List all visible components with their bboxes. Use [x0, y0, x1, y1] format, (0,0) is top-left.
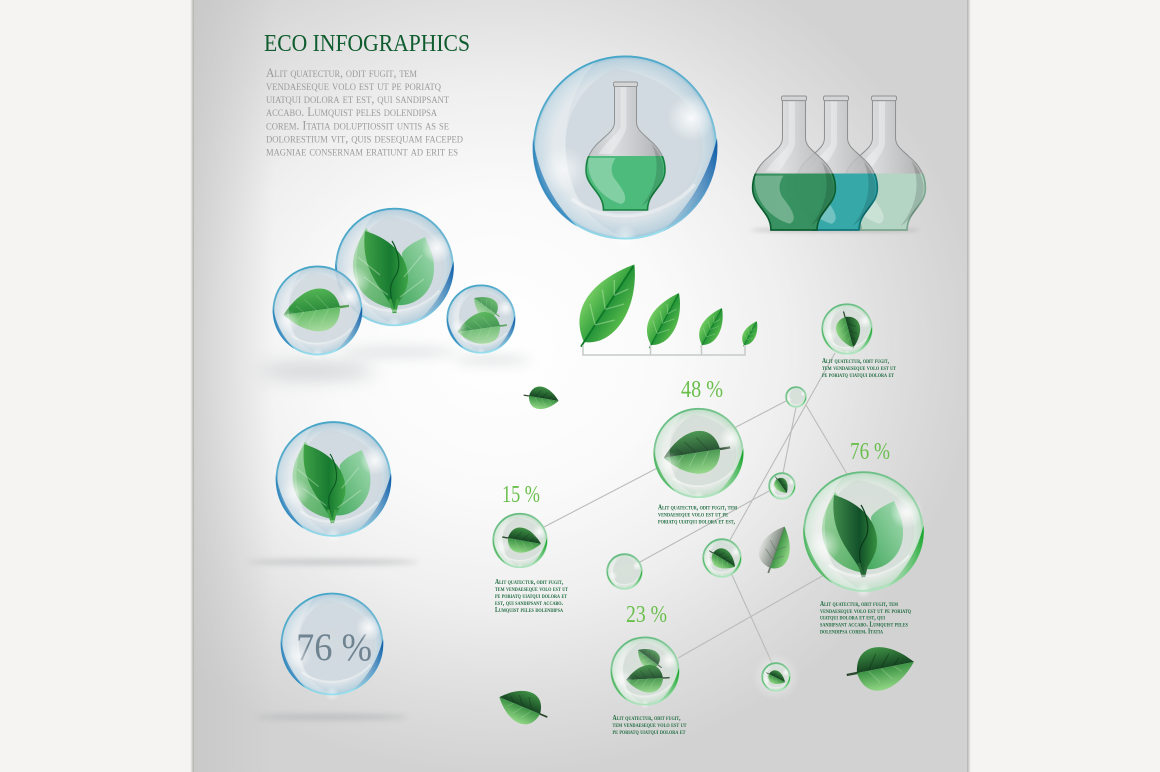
- icon: free leaf bottom left: [493, 682, 554, 732]
- icon: leaf: [832, 308, 865, 351]
- scale bracket: [583, 345, 745, 355]
- icon: free leaf bottom right: [843, 641, 918, 696]
- icon: leaf size 3: [692, 303, 730, 352]
- bubble: 76 percent: [281, 593, 383, 701]
- icon: double leaf: [353, 228, 434, 313]
- caption top bubble: tem vendaeseque volo est ut: [822, 365, 897, 372]
- bubble: plain empty: [607, 554, 642, 591]
- icon: top small leaf: [468, 290, 505, 325]
- intro text block: magniae consernam eratiunt ad erit es: [266, 144, 458, 158]
- intro text block: dolorestium vit, quis desequam faceped: [266, 132, 463, 146]
- caption 76 percent: [820, 601, 911, 636]
- caption 48 percent: poriatq uiatqui dolora et est,: [658, 518, 735, 526]
- connector lines: [544, 353, 847, 663]
- bubble: 23 percent two leaves: [611, 637, 679, 709]
- icon: leaf size 4: [738, 318, 762, 349]
- title: ECO INFOGRAPHICS: [264, 31, 470, 57]
- caption 15 percent: Lumquist peles dolendipsa: [495, 607, 563, 614]
- bubble cluster: right two leaves: [447, 285, 515, 357]
- intro text block: corem. Itatia doluptiossit untis as se: [266, 118, 449, 132]
- icon: leaf size 1: [563, 253, 652, 358]
- caption 48 percent: Alit quatectur, odit fugit, tem: [658, 504, 737, 512]
- icon: pale flask: [843, 96, 925, 230]
- icon: double leaf dark: [822, 492, 903, 577]
- intro text block: [266, 66, 463, 158]
- caption 76 percent: vendaeseque volo est ut pe poriatq: [820, 608, 911, 615]
- caption 23 percent: [612, 715, 687, 736]
- icon: small leaf: [632, 642, 667, 675]
- caption 23 percent: Alit quatectur, odit fugit,: [612, 715, 681, 722]
- icon: bottom leaf: [455, 309, 509, 348]
- caption 76 percent: Alit quatectur, odit fugit, tem: [820, 601, 898, 608]
- caption 15 percent: Alit quatectur, odit fugit,: [495, 579, 563, 586]
- icon: leaf: [770, 473, 792, 497]
- caption 15 percent: pe poriatq uiatqui dolora et: [495, 593, 568, 600]
- bubble cluster: large double leaf: [335, 208, 454, 333]
- caption 76 percent: dolendipsa corem. Itatia: [820, 628, 883, 636]
- bubble with flask: [533, 56, 717, 251]
- percent 23: 23 %: [626, 602, 667, 628]
- caption 48 percent: vendaeseque volo est ut pe: [658, 512, 729, 518]
- intro text block: uiatqui dolora et est, qui sandipsant: [266, 92, 449, 106]
- bubble: small leaf upper: [769, 473, 795, 501]
- bubble: 76 percent: 76 %: [296, 626, 372, 669]
- bubble: 48 percent leaf: [654, 408, 743, 503]
- shadow under middle bubble: [248, 559, 418, 565]
- bubble: 76 percent double leaf: [803, 472, 924, 599]
- icon: flask in bubble: [586, 82, 665, 210]
- icon: leaf: [704, 542, 740, 575]
- icon: leaf: [500, 525, 543, 556]
- caption 15 percent: [495, 579, 569, 614]
- shadow under percent bubble: [256, 714, 408, 720]
- three flasks: [750, 96, 925, 232]
- intro text block: Alit quatectur, odit fugit, tem: [266, 66, 417, 80]
- caption 15 percent: est, qui sandipsant accabo.: [495, 600, 563, 607]
- icon: leaf size 2: [637, 287, 691, 354]
- bubble: network node: [786, 387, 806, 408]
- caption 48 percent: [658, 504, 737, 526]
- caption top bubble: Alit quatectur, odit fugit,: [822, 358, 889, 365]
- caption 76 percent: uiatqui dolora et est, qui: [820, 614, 885, 622]
- icon: double leaf: [293, 441, 370, 523]
- poster panel: [192, 0, 969, 772]
- icon: leaf: [763, 667, 788, 688]
- intro text block: vendaeseque volo est ut pe poriatq: [266, 79, 441, 93]
- icon: teal flask: [795, 96, 877, 230]
- percent 48: 48 %: [681, 377, 723, 403]
- caption 23 percent: pe poriatq uiatqui dolora et: [612, 729, 686, 736]
- icon: green flask: [753, 96, 835, 230]
- bubble: small leaf centre: [703, 539, 741, 579]
- caption top bubble: pe poriatq uiatqui dolora et: [822, 372, 895, 379]
- bubble: top leaf: [822, 304, 872, 357]
- bubble: 15 percent leaf: [493, 514, 547, 571]
- bubble cluster: left leaf: [273, 266, 362, 360]
- icon: grey and green leaf: [753, 521, 798, 578]
- bubble: double leaf left column: [276, 422, 391, 543]
- bubble: bottom small leaf: [752, 653, 800, 701]
- leaf growth row: [563, 253, 762, 358]
- icon: leaf: [281, 285, 352, 336]
- caption 15 percent: tem vendaeseque volo est ut: [495, 586, 569, 593]
- icon: leaf: [660, 426, 733, 479]
- icon: larger leaf: [625, 664, 670, 694]
- shadows under top-left bubbles: [259, 347, 530, 378]
- caption 23 percent: tem vendaeseque volo est ut: [612, 722, 687, 729]
- caption top bubble: [822, 358, 897, 379]
- percent 76: 76 %: [850, 439, 890, 465]
- percent 15: 15 %: [502, 482, 540, 508]
- intro text block: accabo. Lumquist peles dolendipsa: [266, 105, 437, 119]
- icon: free leaf top: [522, 384, 560, 412]
- caption 76 percent: sandipsant accabo. Lumquist peles: [820, 622, 908, 628]
